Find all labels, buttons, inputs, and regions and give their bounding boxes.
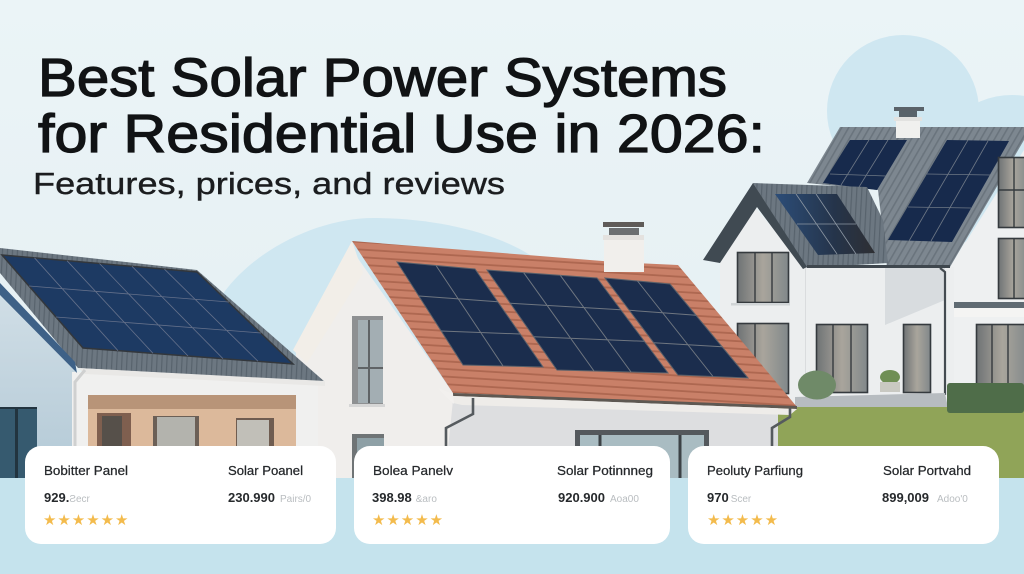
left house facade	[72, 372, 318, 478]
eave	[78, 368, 325, 386]
card 1 right price: 230.990 Pairs/0	[228, 490, 312, 505]
card 3 left price: 970Scer	[707, 490, 752, 505]
card 2 rating stars: ★★★★★	[372, 511, 443, 529]
centre house roof	[352, 241, 797, 407]
card 3 rating stars: ★★★★★	[707, 511, 778, 529]
eave fascia	[453, 393, 797, 409]
card 1 right product name: Solar Poanel	[228, 463, 303, 478]
illustration: left house	[0, 248, 325, 478]
card 3 left product name: Peoluty Parfiung	[707, 463, 803, 478]
product card 1	[25, 446, 336, 544]
solar panel group 2	[487, 270, 668, 373]
left house side wall	[0, 295, 77, 478]
brick band with windows	[88, 395, 296, 455]
gable barge board	[703, 183, 807, 269]
hedge	[947, 383, 1024, 413]
subtitle: Features, prices, and reviews	[33, 166, 505, 201]
left house roof	[0, 248, 325, 382]
decorative sky blobs	[205, 35, 1024, 400]
path	[795, 393, 948, 414]
windows	[738, 158, 1024, 394]
illustration: right house	[703, 107, 1024, 478]
ground band	[0, 478, 1024, 574]
upper roof solar panel left	[823, 140, 907, 190]
card 1 rating stars: ★★★★★★	[43, 511, 128, 529]
planter	[880, 370, 900, 392]
centre house walls	[296, 250, 778, 478]
front roof solar panel	[775, 194, 875, 255]
right house upper roof	[807, 127, 1024, 267]
card 3 right price: 899,009 Adoo'0	[882, 490, 968, 505]
illustration: centre house	[293, 222, 797, 478]
wing balcony band	[954, 302, 1024, 308]
title	[38, 48, 765, 164]
card 1 left product name: Bobitter Panel	[44, 463, 128, 478]
solar panel group 1	[397, 262, 543, 367]
card 3 right product name: Solar Portvahd	[883, 463, 971, 478]
chimney	[894, 107, 924, 138]
card 2 right product name: Solar Potinnneg	[557, 463, 653, 478]
left house solar array	[2, 255, 293, 364]
centre house chimney	[603, 222, 644, 272]
solar panel group 3	[605, 278, 748, 378]
bush	[798, 370, 836, 400]
downpipe	[940, 268, 945, 395]
barge board	[293, 241, 363, 363]
lower wide window	[575, 430, 709, 478]
main wall	[720, 205, 954, 400]
blue fascia	[0, 283, 77, 373]
card 2 left price: 398.98 &aro	[372, 490, 437, 505]
title line 1: Best Solar Power Systems	[38, 48, 727, 108]
product card 2	[354, 446, 670, 544]
downpipes	[446, 398, 790, 446]
upper roof solar panel right	[888, 140, 1009, 242]
title line 2: for Residential Use in 2026:	[38, 104, 765, 164]
lower gable window	[352, 434, 384, 478]
front gable roof	[753, 183, 888, 268]
product card 3	[688, 446, 999, 544]
lawn	[778, 407, 1024, 478]
card 2 left product name: Bolea Panelv	[373, 463, 454, 478]
side window	[0, 407, 37, 478]
gable window	[349, 316, 385, 407]
right house wing wall	[950, 150, 1024, 440]
card 2 right price: 920.900 Aoa00	[558, 490, 639, 505]
card 1 left price: 929.Ƨecr	[44, 490, 91, 505]
downpipe	[75, 370, 85, 446]
